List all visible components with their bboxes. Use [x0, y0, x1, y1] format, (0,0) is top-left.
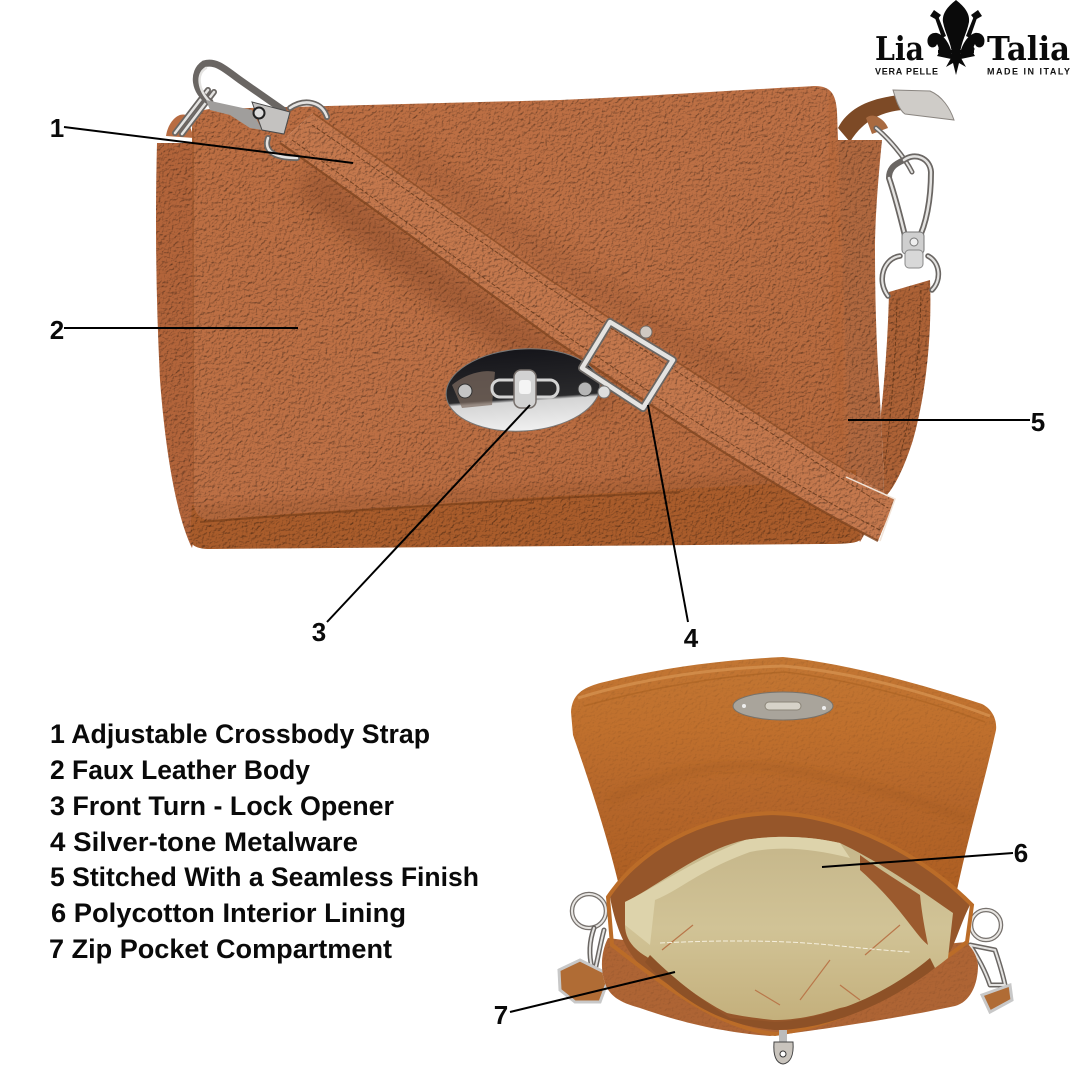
callout number 3: 3	[312, 617, 326, 647]
callout number 5: 5	[1031, 407, 1045, 437]
callout 2 leader	[64, 327, 298, 329]
turn-lock plate	[443, 344, 603, 436]
strap buckle	[582, 322, 673, 408]
lining printed text marks	[662, 925, 900, 1005]
tagline Made in Italy: MADE IN ITALY	[987, 66, 1070, 76]
open bag photo	[559, 657, 1012, 1064]
lining highlight	[625, 837, 850, 945]
fabric lining	[625, 837, 953, 1020]
tagline Vera Pelle: VERA PELLE	[875, 66, 938, 76]
flap top fold shading	[578, 666, 990, 820]
flap lock back plate	[733, 692, 833, 720]
strap edges and stitching	[280, 113, 895, 541]
callout 5 leader	[848, 419, 1030, 421]
callout 4 leader	[648, 405, 688, 622]
left gusset	[156, 143, 198, 548]
feature 2: 2 Faux Leather Body	[50, 755, 310, 785]
tail stitching	[884, 290, 921, 470]
back zip tab and top strip	[838, 90, 954, 142]
callout number 2: 2	[50, 315, 64, 345]
right gusset	[835, 140, 884, 542]
open flap interior	[571, 657, 996, 890]
zip tape lower	[645, 955, 935, 1030]
callout 1 leader	[64, 127, 353, 163]
feature 1: 1 Adjustable Crossbody Strap	[50, 719, 430, 749]
feature 7: 7 Zip Pocket Compartment	[49, 934, 392, 964]
left swivel clasp hardware	[175, 63, 327, 158]
shading on flap	[193, 90, 842, 530]
callout number 4: 4	[684, 623, 699, 653]
seam under flap	[200, 492, 680, 522]
feature 5: 5 Stitched With a Seamless Finish	[50, 862, 479, 892]
front bag body	[602, 938, 978, 1036]
fleur-de-lis emblem	[927, 0, 985, 75]
main bag photo	[156, 63, 954, 549]
interior dark rim	[610, 815, 970, 1030]
left ring and clasp	[559, 894, 610, 1002]
callout number 1: 1	[50, 113, 64, 143]
left hinge tab	[166, 114, 194, 138]
crossbody strap	[280, 113, 895, 541]
callout number 7: 7	[494, 1000, 508, 1030]
flap	[192, 86, 849, 520]
right ring and clasp	[970, 910, 1012, 1012]
bag body leather	[156, 86, 884, 549]
logo wordmark Talia: Talia	[987, 29, 1070, 68]
callout number 6: 6	[1014, 838, 1028, 868]
callout 7 leader	[510, 972, 675, 1012]
feature 6: 6 Polycotton Interior Lining	[51, 898, 406, 928]
zip tape right	[860, 855, 928, 945]
lower pocket	[190, 470, 860, 549]
feature 4: 4 Silver-tone Metalware	[50, 827, 358, 857]
feature list	[49, 719, 479, 964]
leather piping	[608, 813, 972, 1034]
right swivel clasp hardware	[866, 116, 938, 296]
callout 3 leader	[327, 405, 530, 622]
clasp pull at bottom	[774, 1030, 793, 1064]
right strap tail	[878, 280, 930, 498]
callout 6 leader	[822, 853, 1013, 867]
logo wordmark Lia: Lia	[875, 29, 924, 68]
lining stitched seam	[660, 941, 910, 952]
feature 3: 3 Front Turn - Lock Opener	[50, 791, 394, 821]
logo	[875, 0, 1070, 76]
